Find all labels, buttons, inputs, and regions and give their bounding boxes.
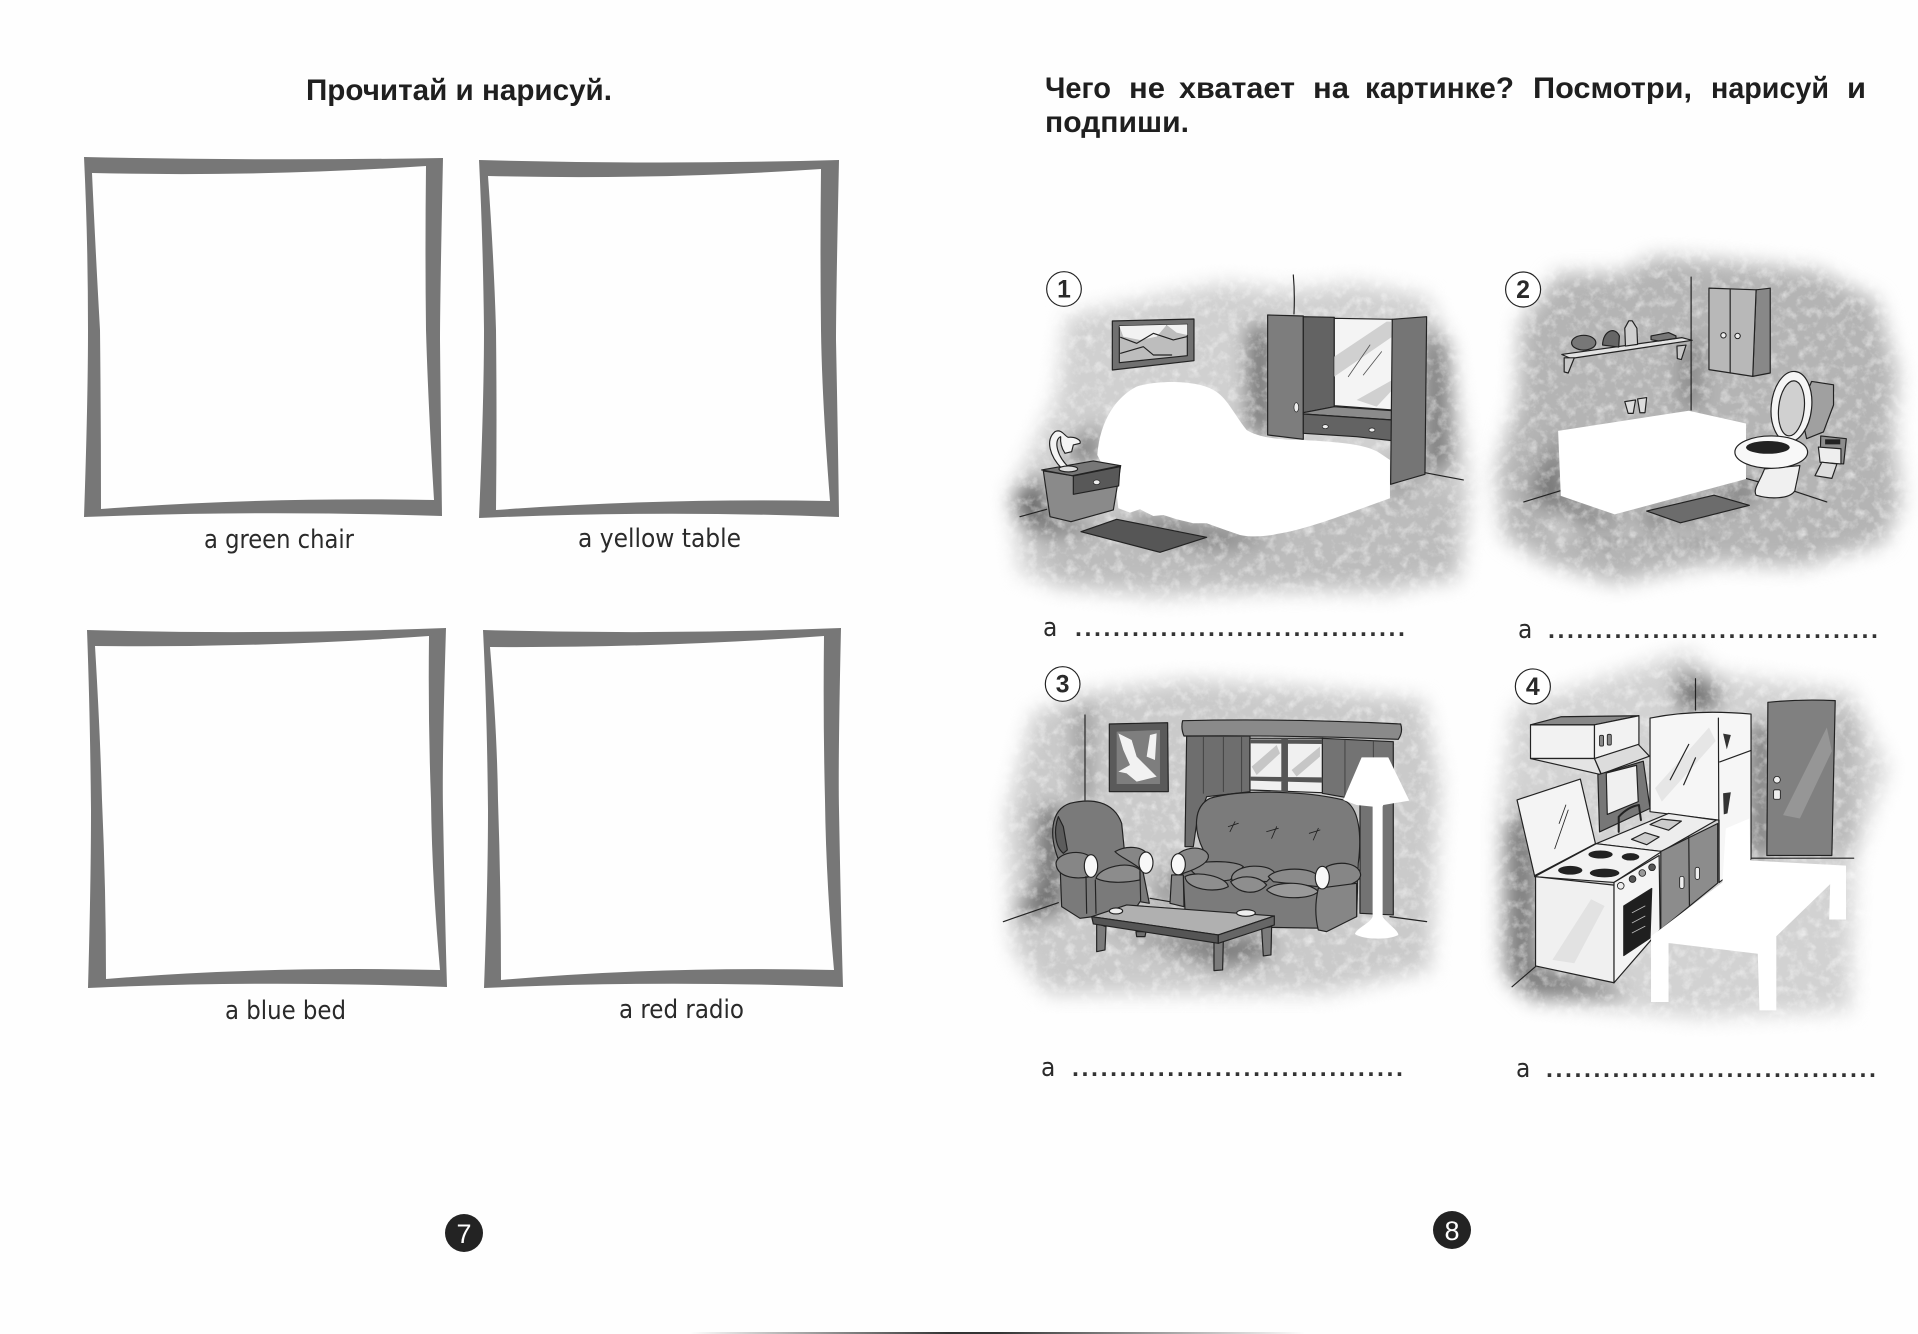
base cabinets <box>1661 824 1718 930</box>
toilet paper <box>1815 436 1846 478</box>
spine shadow at bottom edge <box>690 1332 1305 1334</box>
answer line 3: a <box>1041 1053 1055 1083</box>
wall and floor wash <box>1007 680 1440 993</box>
table silhouette (erased) <box>1651 818 1846 1010</box>
bath mat <box>1647 495 1749 523</box>
page number 7: 7 <box>456 1219 472 1249</box>
fridge <box>1650 712 1751 882</box>
wall and floor wash <box>1010 283 1470 598</box>
answer line 2: ................................... <box>1548 616 1878 644</box>
title: right page: Посмотри, <box>1533 72 1692 105</box>
wall lines <box>1003 715 1427 922</box>
window behind sink <box>1598 761 1650 832</box>
bed silhouette (erased) <box>1097 382 1390 536</box>
page number 7 <box>445 1214 483 1252</box>
curtains <box>1182 720 1402 915</box>
title: right page: и <box>1847 72 1866 105</box>
floor lamp silhouette (erased) <box>1343 757 1409 939</box>
answer line 4: a <box>1516 1054 1530 1084</box>
panel: frame a red radio <box>483 628 843 1025</box>
panel: frame a green chair <box>84 157 443 555</box>
title: right page: подпиши. <box>1045 106 1189 139</box>
answer line 4: ................................... <box>1546 1055 1876 1083</box>
cooker hood and cabinet <box>1531 716 1649 775</box>
page number 8 <box>1433 1211 1471 1249</box>
number 3: 3 <box>1056 672 1070 699</box>
title: right page: картинке? <box>1365 72 1514 105</box>
number 4 <box>1515 669 1550 704</box>
label: a yellow table: a yellow table <box>578 524 741 554</box>
wall cabinet <box>1709 288 1770 376</box>
wall corner and floor lines <box>1512 679 1854 987</box>
label: a red radio: a red radio <box>619 995 744 1025</box>
answer line 3: ................................... <box>1072 1054 1403 1082</box>
taps <box>1625 398 1647 413</box>
number 1 <box>1047 272 1081 306</box>
coffee table <box>1092 905 1274 971</box>
wall and floor wash <box>1500 650 1887 1017</box>
picture 3: living room <box>1003 667 1440 993</box>
toilet <box>1735 369 1834 498</box>
picture 2: bathroom <box>1497 257 1901 583</box>
bath silhouette (erased) <box>1558 411 1746 514</box>
title: right page: Чего <box>1045 72 1111 105</box>
rug <box>1081 519 1207 552</box>
panel: frame a blue bed <box>87 628 447 1026</box>
page number 8: 8 <box>1444 1216 1460 1246</box>
number 3 <box>1045 667 1080 701</box>
wall picture <box>1109 723 1168 792</box>
wardrobe <box>1268 315 1427 484</box>
stove top <box>1535 844 1662 882</box>
frame shape 2 <box>479 160 839 518</box>
open oven lid <box>1517 779 1595 876</box>
wall lines <box>1020 275 1463 517</box>
window <box>1250 738 1322 793</box>
frame shape 3 <box>87 628 447 988</box>
label: a blue bed: a blue bed <box>225 996 346 1026</box>
counter with sinks <box>1596 805 1716 851</box>
number 2: 2 <box>1516 276 1530 304</box>
frame shape 4 <box>483 628 843 988</box>
answer line 2: a <box>1518 615 1532 645</box>
title: left page: Прочитай и нарисуй. <box>306 74 612 107</box>
frame shape 1 <box>84 157 443 517</box>
answer line 1: ................................... <box>1075 614 1405 642</box>
nightstand <box>1042 461 1121 522</box>
stove body <box>1536 855 1660 983</box>
faint show-through text: a green chair <box>1581 529 1715 553</box>
picture 1: bedroom <box>1010 272 1470 598</box>
armchair <box>1053 801 1153 918</box>
title: right page: нарисуй <box>1711 72 1829 105</box>
wall and floor wash <box>1497 257 1901 583</box>
panel: frame a yellow table <box>479 160 839 554</box>
answer line 1: a <box>1043 613 1057 643</box>
number 1: 1 <box>1057 277 1071 304</box>
label: a green chair: a green chair <box>204 525 354 555</box>
number 2 <box>1506 272 1541 307</box>
title: right page: не <box>1129 72 1165 105</box>
number 4: 4 <box>1526 673 1540 701</box>
title: right page: хватает <box>1179 72 1295 105</box>
title: right page <box>1045 72 1866 139</box>
title: right page: на <box>1313 72 1349 105</box>
wall picture <box>1112 319 1194 370</box>
sofa <box>1170 792 1361 932</box>
shelf with items <box>1562 321 1692 373</box>
door <box>1767 700 1835 855</box>
lamp <box>1050 431 1080 472</box>
wall corner and floor lines <box>1524 277 1827 502</box>
picture 4: kitchen <box>1500 650 1887 1017</box>
